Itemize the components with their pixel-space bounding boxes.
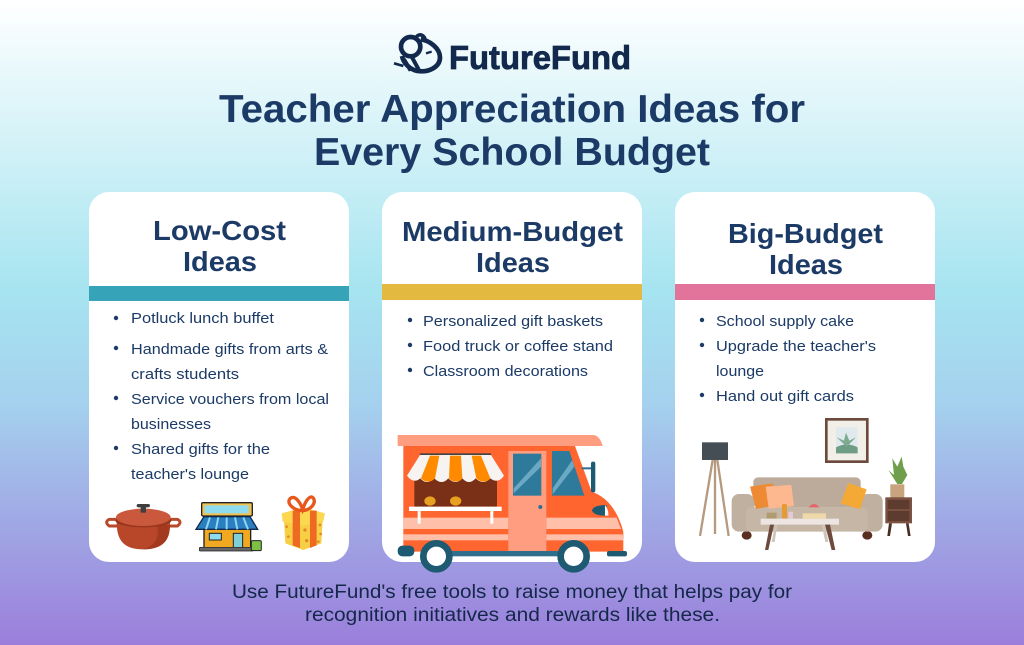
list: low-cost ideas: Service vouchers from local <box>131 391 329 408</box>
list: low-cost ideas: crafts students <box>131 366 239 383</box>
list: big-budget ideas: School supply cake <box>716 313 854 330</box>
list: low-cost ideas: businesses <box>131 416 211 433</box>
logo: FutureFund <box>394 35 631 76</box>
icon: food truck <box>398 435 627 569</box>
list: big-budget ideas: Hand out gift cards <box>716 388 854 405</box>
list: low-cost ideas: Handmade gifts from arts & <box>131 341 328 358</box>
list: big-budget ideas: Upgrade the teacher's <box>716 338 876 355</box>
heading: big-budget ideas: Ideas <box>769 249 843 280</box>
list: low-cost ideas: Potluck lunch buffet <box>131 310 275 327</box>
title <box>219 88 805 174</box>
heading: big-budget ideas <box>728 218 883 280</box>
heading: low-cost ideas: Ideas <box>183 246 257 277</box>
heading: big-budget ideas: Big-Budget <box>728 218 883 249</box>
footer text <box>232 582 793 626</box>
title: Teacher Appreciation Ideas for <box>219 88 805 131</box>
title: Every School Budget <box>314 131 710 174</box>
heading: low-cost ideas: Low-Cost <box>153 215 286 246</box>
heading: low-cost ideas <box>153 215 286 277</box>
footer text: Use FutureFund's free tools to raise money that helps pay for <box>232 582 793 603</box>
icon: storefront <box>196 503 261 551</box>
list: big-budget ideas: lounge <box>716 363 764 380</box>
logo: FutureFund: FutureFund <box>449 39 631 76</box>
list: low-cost ideas <box>114 310 329 483</box>
list: medium-budget ideas: Classroom decorations <box>423 363 588 380</box>
panel: medium-budget ideas <box>382 192 642 569</box>
list: low-cost ideas: Shared gifts for the <box>131 441 270 458</box>
list: medium-budget ideas <box>408 313 613 380</box>
heading: medium-budget ideas: Ideas <box>476 247 550 278</box>
panel: big-budget ideas <box>675 192 935 562</box>
icon: gift box <box>282 497 325 550</box>
footer text: recognition initiatives and rewards like these. <box>305 605 720 626</box>
list: big-budget ideas <box>700 313 876 405</box>
list: medium-budget ideas: Personalized gift baskets <box>423 313 603 330</box>
heading: medium-budget ideas: Medium-Budget <box>402 216 623 247</box>
icon: living room <box>700 418 912 550</box>
heading: medium-budget ideas <box>402 216 623 278</box>
panel: low-cost ideas <box>89 192 349 562</box>
icon: cooking pot <box>107 504 180 549</box>
list: low-cost ideas: teacher's lounge <box>131 466 249 483</box>
list: medium-budget ideas: Food truck or coffee stand <box>423 338 613 355</box>
